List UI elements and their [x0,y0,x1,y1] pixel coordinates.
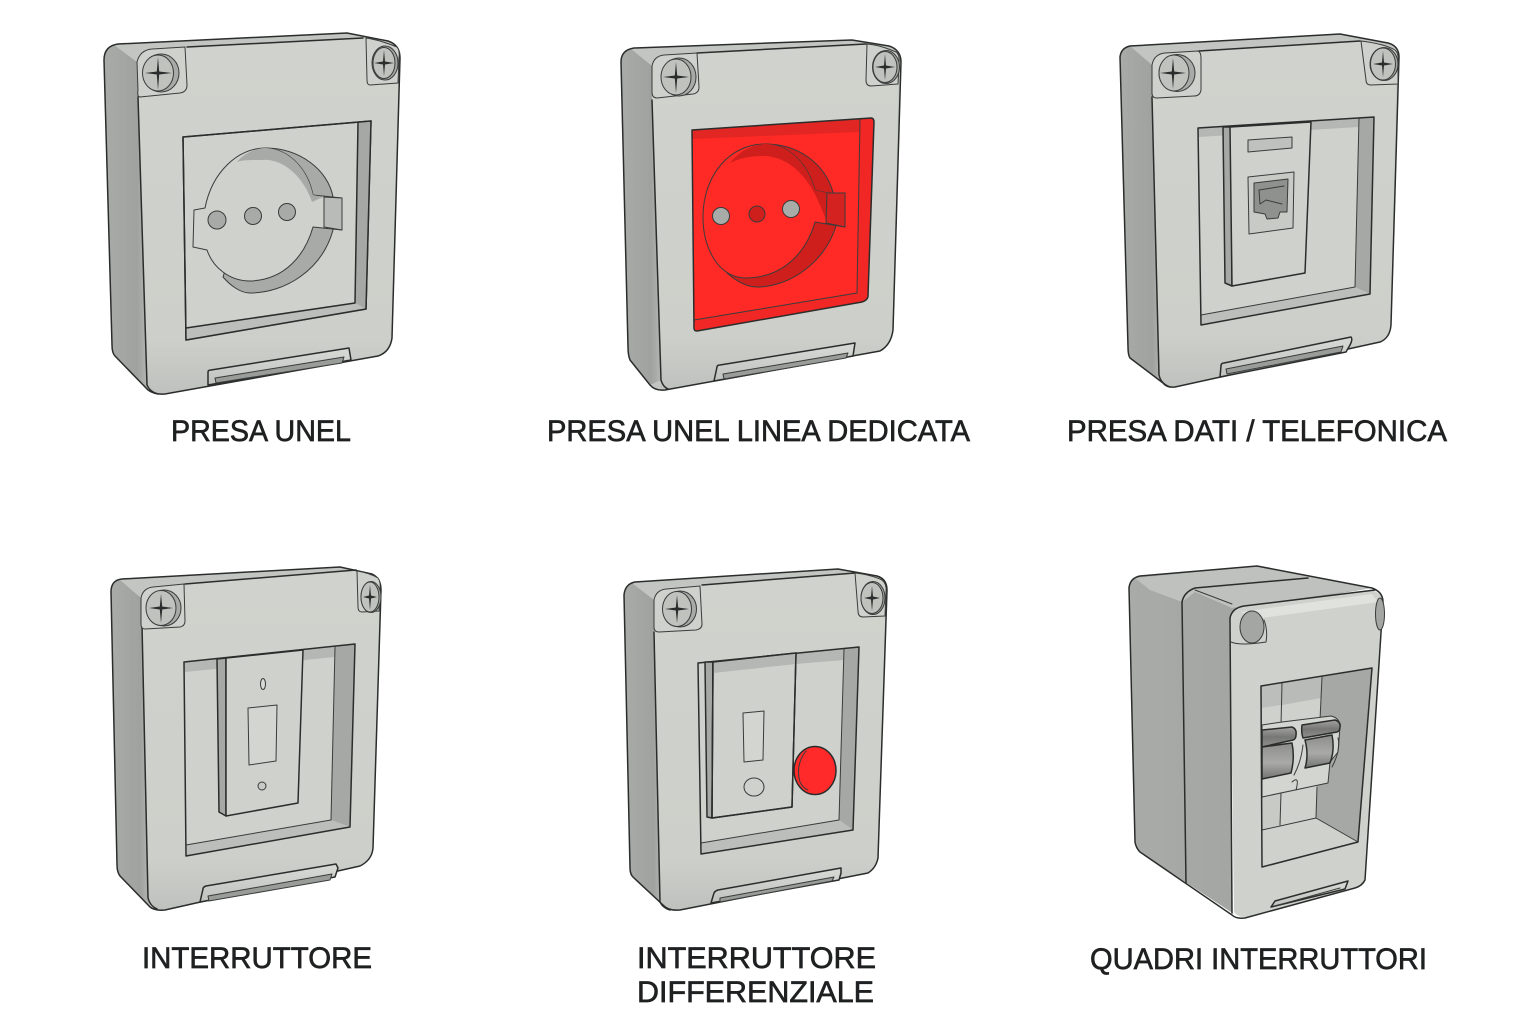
label: PRESA DATI / TELEFONICA [1067,415,1447,448]
screw tab right [855,573,886,617]
socket [193,148,342,293]
screw left [1231,611,1267,644]
bottom latch [714,343,855,381]
window with breakers [1261,668,1372,867]
screw tab right [1361,41,1398,85]
window recess [184,644,355,856]
switch plate [217,650,303,816]
label [637,942,876,1009]
screw tab left [137,47,187,97]
label: INTERRUTTORE [142,942,372,975]
panel: interruttore differenziale [624,569,887,1009]
panel: presa UNEL linea dedicata [547,40,970,448]
screw right [1376,598,1384,630]
switch plate [705,653,796,818]
label: PRESA UNEL LINEA DEDICATA [547,415,970,448]
panel: presa dati telefonica [1067,34,1447,448]
bottom latch [711,868,841,903]
label: INTERRUTTORE [637,942,876,975]
label: PRESA UNEL [171,415,351,448]
screw tab right [357,571,381,612]
bottom latch [1271,881,1348,907]
panel: quadri interruttori [1090,566,1427,976]
red window [692,118,874,331]
red socket [703,144,845,287]
window recess [1198,117,1374,325]
data plate [1223,122,1311,286]
screw tab right [866,44,900,86]
red button [794,746,836,794]
screw tab left [652,53,699,98]
label: DIFFERENZIALE [637,976,874,1009]
enclosure body [104,33,400,394]
window recess [698,647,859,854]
bottom latch [208,348,351,385]
panel: presa UNEL [104,33,400,448]
bottom latch [200,864,338,902]
screw tab left [141,584,185,629]
enclosure body [1120,34,1399,387]
bottom latch [1220,337,1352,377]
enclosure body [624,569,887,910]
screw tab right [366,38,399,85]
enclosure body [111,567,381,910]
screw tab left [1152,51,1201,98]
screw tab left [654,586,702,632]
enclosure body [1129,566,1383,918]
window recess [183,121,371,340]
label: QUADRI INTERRUTTORI [1090,943,1427,976]
enclosure body [621,40,901,390]
panel: interruttore [111,567,381,975]
